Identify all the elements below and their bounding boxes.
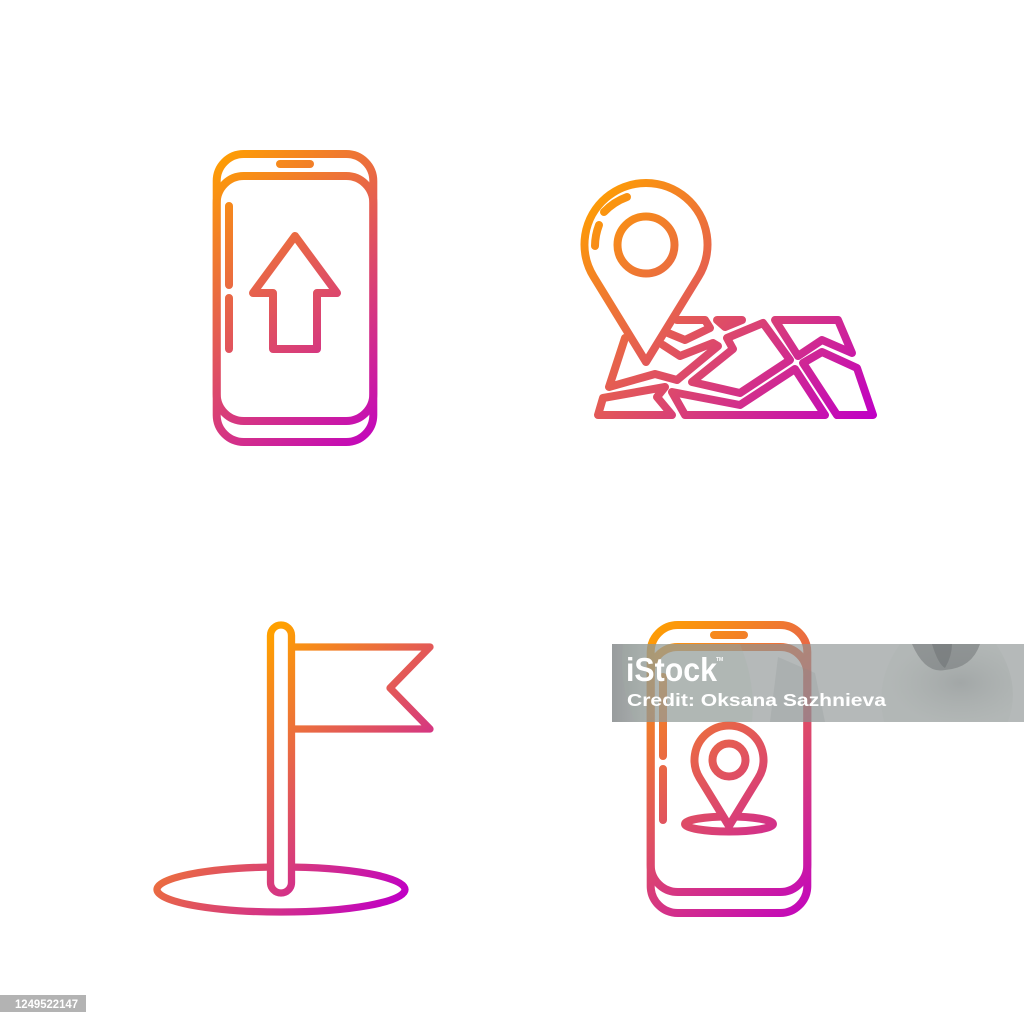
image id tag: 1249522147 — [15, 999, 78, 1011]
icon: flag on ground — [157, 625, 430, 912]
ground ellipse under pin — [685, 816, 773, 832]
icon: smartphone with location pin — [651, 625, 807, 913]
icon: smartphone with up arrow — [217, 154, 373, 442]
watermark credit: Credit: Oksana Sazhnieva — [627, 690, 886, 710]
small map pin — [694, 725, 764, 826]
arrow: up arrow on screen — [253, 236, 337, 349]
image id tag — [0, 995, 86, 1012]
map pin — [584, 183, 708, 362]
watermark band — [612, 644, 1024, 722]
watermark trademark: TM — [716, 657, 723, 663]
icon: location pin on folded map — [584, 183, 873, 415]
watermark logo: iStock — [626, 651, 718, 688]
